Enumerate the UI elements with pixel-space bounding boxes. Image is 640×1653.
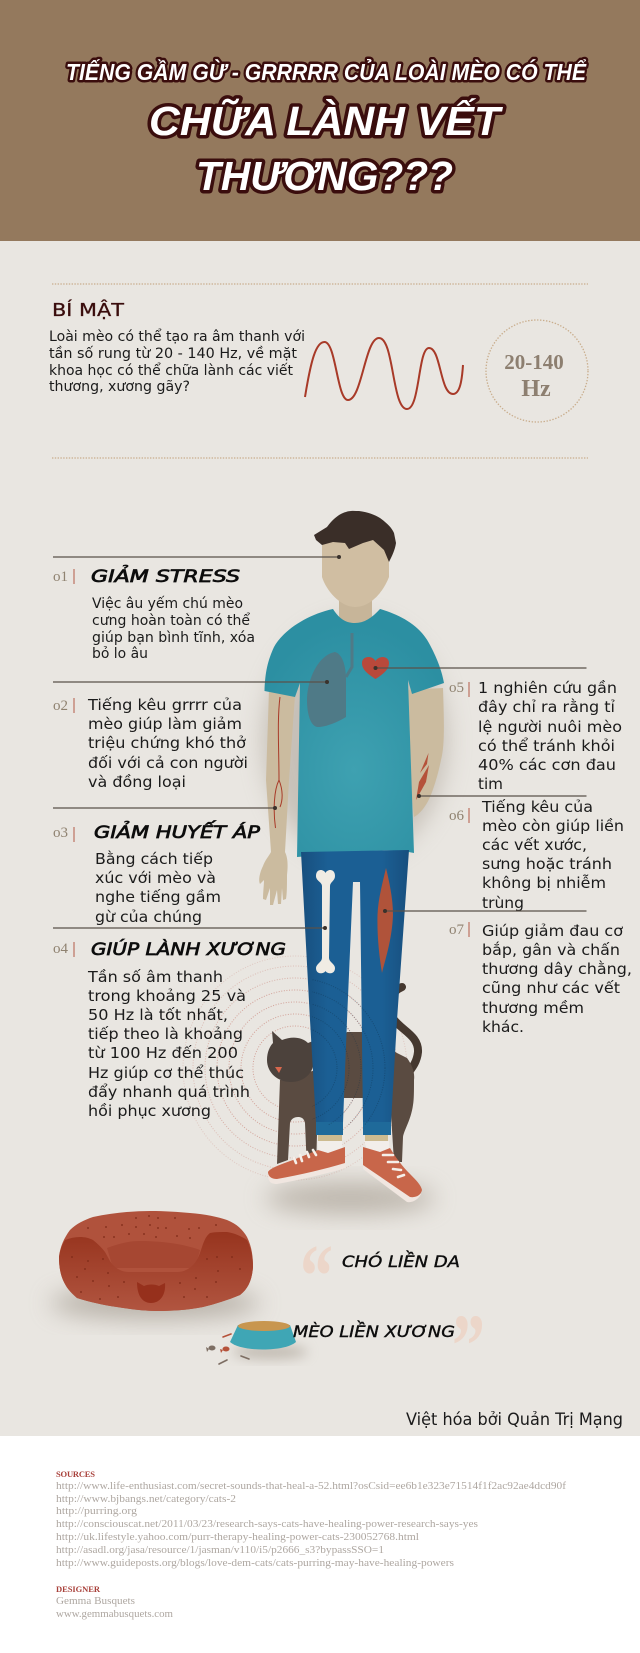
secret text block: khoa học có thể chữa lành các viết [49, 362, 294, 379]
quote: dog [300, 1227, 460, 1326]
leader line 06 [417, 794, 586, 798]
bed back [59, 1211, 253, 1311]
number 03 [53, 825, 74, 842]
text 07: bắp, gân và chấn [482, 941, 620, 959]
text 05: tim [478, 775, 503, 793]
text 07 [482, 922, 632, 1036]
secret text block [49, 328, 305, 395]
text 05: đây chỉ ra rằng tỉ [478, 698, 615, 716]
number 02 [53, 698, 74, 714]
item 06: scratches [417, 794, 624, 912]
quote text: dog: CHÓ LIỀN DA [342, 1250, 460, 1271]
number 05 [449, 680, 470, 697]
man [259, 511, 444, 1202]
sources list [56, 1480, 566, 1569]
text 05 [478, 679, 622, 793]
text 02: đối với cả con người [88, 754, 248, 772]
number 05: o5 [449, 680, 464, 696]
food bowl [230, 1321, 308, 1359]
pet bed [50, 1211, 260, 1319]
sound rings [183, 956, 407, 1180]
text 04 [87, 968, 250, 1120]
number 02: o2 [53, 698, 68, 714]
heading 01: GIẢM STRESS [91, 564, 240, 587]
heart [362, 657, 389, 679]
text 06: trùng [482, 894, 524, 912]
text 06: các vết xước, [482, 836, 587, 854]
text 06 [481, 798, 624, 912]
item 07: muscle [383, 909, 632, 1036]
bone: grey left [219, 1360, 227, 1364]
title: CHỮA LÀNH VẾT [149, 98, 503, 144]
text 02: và đồng loại [88, 773, 186, 791]
sources list: http://consciouscat.net/2011/03/23/research-says-cats-have-healing-power-research-says-yes [56, 1518, 478, 1530]
text 06: không bị nhiễm [482, 874, 606, 892]
title: TIẾNG GẦM GỪ - GRRRRR CỦA LOÀI MÈO CÓ THỂ [66, 58, 587, 85]
text 06: Tiếng kêu của [481, 798, 593, 816]
heading 03: GIẢM HUYẾT ÁP [94, 819, 261, 843]
text 06: mèo còn giúp liền [482, 817, 624, 835]
arm: right [408, 688, 444, 817]
secret text block: tần số rung từ 20 - 140 Hz, về mặt [49, 345, 298, 362]
text 01: cưng hoàn toàn có thể [92, 612, 250, 629]
number 04 [53, 941, 74, 957]
text 04: trong khoảng 25 và [88, 987, 246, 1005]
neck [339, 590, 372, 626]
shirt [264, 609, 444, 857]
footer panel [0, 1436, 640, 1653]
text 07: Giúp giảm đau cơ [482, 922, 624, 940]
secret text block: Loài mèo có thể tạo ra âm thanh với [49, 328, 305, 345]
bed front [59, 1232, 253, 1311]
sources list: http://asadl.org/jasa/resource/1/jasman/v110/i5/p2666_s3?bypassSSO=1 [56, 1544, 384, 1556]
number 01: o1 [53, 569, 68, 585]
text 04: đẩy nhanh quá trình [88, 1083, 250, 1101]
item 05: heart [374, 666, 622, 793]
number 01 [53, 569, 74, 585]
shoe: right [363, 1147, 422, 1202]
hair [314, 511, 396, 562]
secret text block: thương, xương gãy? [49, 379, 190, 395]
lung [307, 633, 352, 727]
text 03: nghe tiếng gầm [95, 888, 221, 906]
text 05: 1 nghiên cứu gần [478, 679, 617, 697]
quote text: cat: MÈO LIỀN XƯƠNG [293, 1320, 455, 1341]
panel: secret [49, 299, 588, 422]
text 04: hồi phục xương [88, 1102, 211, 1120]
rings over legs [312, 980, 386, 1125]
bed seat [107, 1241, 200, 1268]
veins [274, 697, 282, 828]
jean cuffs [316, 1122, 391, 1135]
text 05: có thể tránh khỏi [478, 737, 615, 755]
item 04: bones [53, 926, 327, 1120]
text 03: gừ của chúng [95, 908, 202, 926]
closing quote mark: ” [452, 1297, 485, 1396]
fish: grey [206, 1346, 216, 1352]
item 03: blood pressure [53, 806, 277, 926]
text 03 [95, 850, 221, 926]
fish: red [220, 1346, 230, 1353]
number 07: o7 [449, 922, 464, 938]
cat nose [275, 1067, 282, 1073]
text 05: lệ người nuôi mèo [478, 718, 622, 736]
sources list: http://www.guideposts.org/blogs/love-dem-cats/cats-purring-may-have-healing-powers [56, 1557, 454, 1569]
leader line 04 [53, 926, 327, 930]
leader line 05 [374, 666, 586, 670]
header band [0, 0, 640, 241]
sound wave [305, 338, 463, 409]
translation credit: Việt hóa bởi Quản Trị Mạng [406, 1410, 623, 1429]
sources heading: SOURCES [56, 1469, 95, 1479]
socks [317, 1135, 390, 1158]
number 03: o3 [53, 825, 68, 841]
number 06: o6 [449, 808, 464, 824]
text 04: 50 Hz là tốt nhất, [88, 1006, 228, 1024]
sources list: http://purring.org [56, 1505, 138, 1517]
sources list: http://uk.lifestyle.yahoo.com/purr-therapy-healing-power-cats-230052768.html [56, 1531, 419, 1543]
jeans [301, 850, 409, 1123]
title [66, 58, 587, 199]
designer credit: www.gemmabusquets.com [56, 1608, 173, 1620]
heading: secret: BÍ MẬT [52, 299, 125, 321]
text 04: Tần số âm thanh [87, 968, 223, 986]
muscle [377, 868, 393, 973]
frequency badge [486, 320, 588, 422]
pet food [206, 1334, 249, 1364]
text 02 [87, 696, 248, 791]
sources list: http://www.bjbangs.net/category/cats-2 [56, 1493, 236, 1505]
text 05: 40% các cơn đau [478, 756, 616, 774]
number 04: o4 [53, 941, 68, 957]
text 03: Bằng cách tiếp [95, 850, 213, 868]
cat head [267, 1031, 318, 1082]
text 04: Hz giúp cơ thể thúc [88, 1064, 244, 1082]
designer credit: Gemma Busquets [56, 1595, 135, 1607]
item 01: stress [53, 555, 341, 662]
leader line 07 [383, 909, 586, 913]
text 02: triệu chứng khó thở [88, 734, 247, 752]
text 02: Tiếng kêu grrrr của [87, 696, 242, 714]
text 01: Việc âu yếm chú mèo [92, 595, 243, 612]
quote: cat [293, 1297, 485, 1396]
opening quote mark: “ [300, 1227, 333, 1326]
bed emblem [137, 1282, 165, 1303]
sources list: http://www.life-enthusiast.com/secret-sounds-that-heal-a-52.html?osCsid=ee6b1e323e71514f1f2ac92ae4dcd90f [56, 1480, 566, 1492]
text 01: bỏ lo âu [92, 646, 148, 662]
bone [316, 870, 335, 973]
cat body [277, 1032, 414, 1170]
figure shadows [263, 620, 447, 1214]
leader line 03 [53, 806, 277, 810]
arm: left [259, 690, 295, 905]
text 07: thương mềm [482, 999, 584, 1017]
text 07: cũng như các vết [482, 979, 620, 997]
head [322, 540, 389, 607]
text 07: thương dây chằng, [482, 960, 632, 978]
text 01: giúp bạn bình tĩnh, xóa [92, 630, 255, 646]
bone: grey right [241, 1356, 249, 1359]
cat tail [389, 987, 418, 1072]
designer heading: DESIGNER [56, 1584, 101, 1594]
shoe: left [268, 1147, 346, 1184]
text 06: sưng hoặc tránh [482, 855, 612, 873]
text 04: tiếp theo là khoảng [88, 1025, 243, 1043]
frequency badge: 20-140 [504, 350, 564, 374]
text 01 [92, 595, 255, 662]
designer credit [56, 1595, 173, 1620]
heading 04: GIÚP LÀNH XƯƠNG [91, 938, 286, 960]
text 03: xúc với mèo và [95, 869, 216, 887]
bone: red [223, 1334, 231, 1337]
frequency badge: Hz [521, 376, 551, 402]
text 07: khác. [482, 1018, 524, 1036]
text 02: mèo giúp làm giảm [88, 715, 242, 733]
scratches [416, 753, 429, 800]
item 02: breathing [53, 680, 329, 791]
cat [267, 987, 418, 1170]
leader line 01 [53, 555, 341, 559]
title: THƯƠNG??? [196, 153, 453, 199]
leader line 02 [53, 680, 329, 684]
text 04: từ 100 Hz đến 200 [88, 1044, 238, 1062]
